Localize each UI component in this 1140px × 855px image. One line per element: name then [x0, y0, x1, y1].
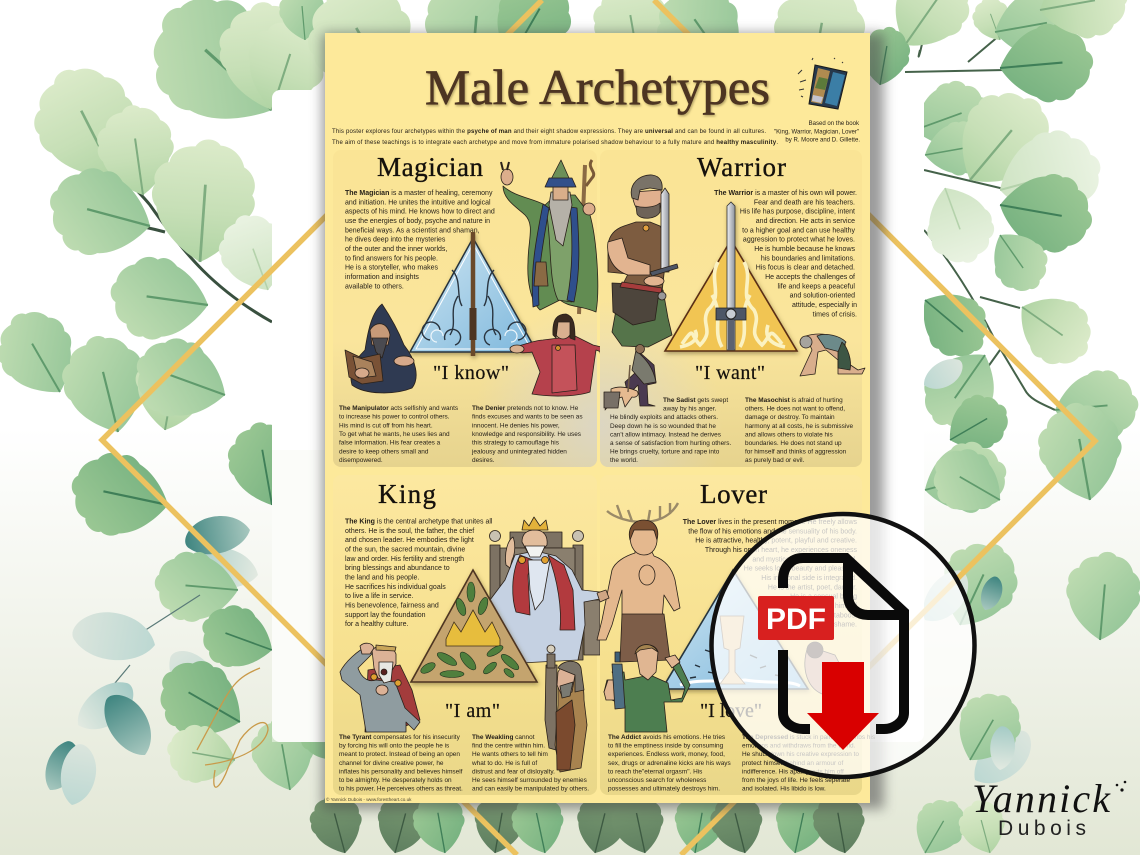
text: The Warrior: to a higher goal and can use healthy: [742, 227, 855, 234]
figure: The Tyrant: [340, 643, 420, 732]
botanical background: leaves right: [855, 0, 1140, 855]
text: The Sadist: away by his anger.: [663, 406, 717, 413]
text: The Magician: [345, 190, 495, 290]
text: The Denier: jealousy and unintegrated hidden: [471, 448, 567, 455]
poster shadow: [322, 33, 884, 809]
heading: Lover: Lover: [700, 479, 767, 509]
figure: The King on throne: [488, 517, 605, 664]
text: The Denier: The Denier pretends not to know. He: [472, 405, 579, 412]
figure: Magician wizard: [501, 160, 598, 314]
text: The King: bring blessings and abundance to: [345, 565, 450, 572]
text: The Masochist: and allows others to violate his: [745, 431, 833, 438]
text: The Depressed: emotions and withdraws from the world.: [742, 743, 856, 750]
text: The Weakling: find the centre within him.: [472, 743, 545, 750]
text: The Tyrant: channel for divine creative power, he: [339, 760, 444, 767]
triangle: air swirls with wand: [410, 232, 537, 356]
text: The Magician: available to others.: [345, 283, 404, 290]
triangle: earth with crown and oak leaves: [411, 570, 537, 682]
text: The Magician: he dives deep into the mysteries: [345, 237, 446, 244]
text: The Manipulator: To get what he wants, he uses lies and: [339, 431, 450, 438]
text: The Tyrant: to his power. He perceives others as threat.: [339, 786, 463, 793]
quote: I want: "I want": [695, 362, 765, 384]
text: The Addict: sex, drugs or adrenaline kicks are his ways: [608, 760, 731, 767]
text: The Denier: [471, 405, 583, 464]
text: The Tyrant: The Tyrant compensates for his insecurity: [339, 734, 461, 741]
quote: I love: "I love": [700, 700, 762, 722]
white square panel behind poster: [272, 90, 924, 742]
text: The Masochist: boundaries. He does not stand up: [745, 440, 842, 447]
figure: The Warrior: [608, 175, 678, 347]
text: The Lover: His irrational side is integrated.: [761, 575, 857, 582]
intro text: [332, 129, 778, 146]
text: The Lover: He is a sensual being: [790, 594, 857, 601]
quote: I know: "I know": [433, 362, 509, 384]
book reference: [774, 121, 860, 144]
book reference: by R. Moore and D. Gillette.: [785, 138, 860, 144]
text: The Depressed: indifference. His apathy cuts him off: [742, 768, 844, 775]
text: The Tyrant: [339, 734, 463, 793]
text: The Warrior: times of crisis.: [813, 311, 857, 318]
intro text: The aim of these teachings is to integrate each archetype and move from immature polarised shadow behaviour to a fully mature and healthy masculinity.: [332, 140, 778, 146]
text: The Sadist: [610, 397, 732, 464]
text: The Warrior: his boundaries and limitations.: [761, 255, 855, 262]
icon: book: [798, 58, 847, 109]
text: The Denier: knowledge and responsibility. He uses: [472, 431, 581, 438]
panel: Warrior: [600, 150, 865, 467]
icon: document outline: [783, 558, 904, 729]
text: The Masochist: for himself and thinks of aggression: [745, 449, 847, 456]
text: The Sadist: The Sadist gets swept: [663, 397, 728, 404]
botanical background: leaves left: [0, 0, 361, 808]
text: The Addict: experiences. Endless work, money, food,: [608, 751, 725, 758]
icon: PDF tag: PDF: [766, 603, 826, 636]
text: The Masochist: others. He does not want to offend,: [745, 406, 845, 413]
text: The Lover: the flow of his emotions and the sensuality of his body.: [688, 528, 857, 535]
text: The Depressed: protect himself behind an armour of: [742, 760, 843, 767]
text: The King: He sacrifices his individual goals: [345, 584, 446, 591]
text: The Masochist: damage or destroy. To maintain: [745, 414, 835, 421]
text: The Sadist: He brings cruelty, torture and rape into: [610, 449, 720, 456]
text: The Lover: Through his open heart, he experiences oneness: [705, 547, 857, 554]
text: The Lover: fully, without taboos,: [794, 612, 857, 619]
book reference: Based on the book: [809, 121, 860, 127]
panel: King: [333, 475, 605, 795]
text: The Magician: and initiation. He unites the intuitive and logical: [345, 199, 491, 206]
text: The Magician: beneficial ways. As a scientist and shaman,: [345, 227, 480, 234]
text: The Weakling: He wants others to tell him: [472, 751, 548, 758]
text: The Masochist: The Masochist is afraid of hurting: [745, 397, 843, 404]
icon: download arrow: [807, 662, 879, 750]
book reference: "King, Warrior, Magician, Lover": [774, 130, 859, 136]
signature: Yannick Dubois: [972, 776, 1126, 840]
text: The Denier: finds excuses and wants to be seen as: [472, 414, 583, 421]
text: The Warrior: He is humble because he knows: [754, 246, 855, 253]
text: The Depressed: and isolated. His libido is low.: [742, 786, 826, 793]
PDF download badge: [712, 514, 974, 777]
text: The Tyrant: meant to protect. Instead of being an open: [339, 751, 460, 758]
text: The King: [345, 518, 493, 628]
signature: Yannick Dubois: Dubois: [998, 817, 1086, 840]
text: The King: His benevolence, fairness and: [345, 602, 439, 610]
text: The King: law and order. His fertility and strength: [345, 556, 464, 563]
text: The Weakling: distrust and fear of disloyalty.: [472, 768, 555, 775]
text: The Lover: He is attractive, healthy, potent, playful and creative.: [695, 538, 857, 545]
text: The Magician: aspects of his mind. He knows how to direct and: [345, 209, 495, 216]
poster: [325, 33, 875, 803]
figure: The Masochist: [800, 334, 865, 376]
text: The Warrior: life and keeps a peaceful: [778, 283, 855, 290]
heading: Magician: Magician: [377, 152, 484, 182]
text: The Denier: innocent. He denies his power,: [472, 422, 560, 429]
text: The Manipulator: [339, 405, 458, 464]
text: The Sadist: Deep down he is so wounded that he: [610, 423, 716, 430]
text: The Manipulator: to increase his power to control others.: [339, 414, 450, 421]
text: The Manipulator: The Manipulator acts selfishly and wants: [339, 405, 458, 412]
text: The King: to live a life in service.: [345, 593, 414, 600]
text: The Addict: possesses and ultimately destroys him.: [608, 786, 720, 793]
text: The Masochist: as purely bad or evil.: [745, 457, 805, 464]
panel: Lover: [597, 475, 875, 795]
text: The Warrior: attitude, especially in: [792, 302, 857, 309]
text: The Weakling: and can easily be manipulated by others.: [472, 786, 589, 793]
panel: Magician: [333, 150, 610, 467]
text: The Lover: and mystical union with the world.: [752, 556, 857, 563]
text: The Weakling: [471, 734, 589, 793]
heading: King: King: [378, 479, 436, 509]
figure: The Denier: [510, 314, 610, 396]
text: The Tyrant: by forcing his will onto the people he is: [339, 743, 449, 750]
text: The Warrior: The Warrior is a master of his own will power.: [714, 190, 857, 197]
text: The Sadist: a sense of satisfaction from hurting others.: [610, 440, 732, 447]
text: The Denier: this strategy to camouflage his: [472, 440, 559, 447]
text: The Manipulator: disempowered.: [339, 457, 383, 464]
text: The Addict: unconscious search for wholeness: [608, 777, 706, 784]
figure: The Addict: [604, 644, 690, 732]
text: The Masochist: [745, 397, 853, 464]
text: The King: of the sun, the sacred mountain, divine: [345, 546, 465, 554]
text: The Masochist: harmony at all costs, he is submissive: [745, 423, 853, 430]
text: The Manipulator: His mind is cut off from his heart.: [339, 422, 433, 429]
text: The King: support lay the foundation: [345, 612, 426, 619]
text: The Warrior: aggression to protect what he loves.: [743, 237, 855, 244]
text: The Manipulator: desire to keep others small and: [339, 448, 429, 455]
text: The Manipulator: false information. His fear creates a: [339, 440, 441, 447]
text: The Warrior: His life has purpose, discipline, intent: [740, 209, 855, 216]
text: The Warrior: and solution-oriented: [790, 293, 855, 300]
lens: [712, 514, 974, 777]
text: The Magician: He is a storyteller, who makes: [345, 265, 438, 272]
figure: The Manipulator: [345, 304, 416, 393]
text: The Warrior: [714, 190, 857, 318]
text: The Lover: who gives himself: [801, 603, 857, 610]
text: The Weakling: He sees himself surrounded by enemies: [472, 777, 587, 784]
figure: The Depressed: [805, 642, 848, 695]
text: The Warrior: His focus is clear and detached.: [756, 265, 855, 272]
text: The Magician: use the energies of body, psyche and nature in: [345, 218, 490, 225]
triangle: water with cup: [662, 570, 808, 689]
figure: The Lover: [597, 503, 680, 662]
text: The Magician: to find answers for his people.: [345, 255, 438, 262]
text: The Denier: desires.: [472, 457, 495, 464]
text: The King: others. He is the soul, the father, the chief: [345, 528, 474, 535]
footer credit: © Yannick Dubois - www.forestheart.co.uk: [326, 796, 412, 802]
text: The Sadist: can't allow intimacy. Instead he derives: [610, 431, 721, 438]
text: The Magician: information and insights: [345, 274, 419, 281]
text: The Weakling: The Weakling cannot: [472, 734, 535, 741]
text: The Sadist: He blindly exploits and attacks others.: [610, 414, 718, 421]
text: The Depressed: [742, 734, 875, 793]
text: The Sadist: the world.: [610, 457, 638, 464]
text: The King: the land and his people.: [345, 574, 419, 582]
intro text: This poster explores four archetypes within the psyche of man and their eight shadow expressions. They are universal and can be found in all cultures.: [332, 129, 766, 135]
figure: The Weakling with throne post: [545, 645, 587, 772]
text: The Warrior: and direction. He acts in service: [756, 218, 855, 225]
text: The Addict: The Addict avoids his emotions. He tries: [608, 734, 725, 741]
botanical background: leaves top and bottom: [277, 0, 873, 855]
text: The Lover: The Lover lives in the present moment. He freely allows: [683, 519, 857, 526]
signature: Yannick Dubois: Yannick: [972, 776, 1111, 821]
text: The Lover: He is the artist, poet, dancer.: [768, 584, 857, 591]
text: The Addict: [608, 734, 731, 793]
text: The Depressed: from the joys of life. He feels seperate: [742, 777, 850, 784]
text: The Depressed: The Depressed is stuck in pain. He numbs his: [742, 734, 875, 741]
text: The Warrior: Fear and death are his teachers.: [754, 199, 855, 206]
figure: The Sadist: [604, 344, 656, 410]
text: The Depressed: He shuts down his creative expression to: [742, 751, 859, 758]
title: Male Archetypes: [425, 59, 770, 115]
text: The Addict: to reach the"eternal orgasm". His: [608, 768, 702, 775]
heading: Warrior: Warrior: [697, 152, 786, 182]
text: The Magician: The Magician is a master of healing, ceremony: [345, 190, 493, 197]
text: The Magician: of the outer and the inner worlds,: [345, 246, 447, 253]
text: The King: The King is the central archetype that unites all: [345, 518, 493, 526]
text: The Weakling: what to do. He is full of: [471, 760, 537, 767]
triangle: fire with sword: [665, 202, 797, 351]
icon: PDF tag: [758, 596, 834, 640]
text: The Addict: to fill the emptiness inside by consuming: [608, 743, 724, 750]
text: The Warrior: He accepts the challenges of: [765, 274, 855, 281]
text: The King: for a healthy culture.: [345, 621, 408, 628]
text: The Lover: He seeks love, beauty and pleasure.: [744, 566, 857, 573]
text: The Tyrant: to be almighty. He desperately holds on: [339, 777, 452, 784]
text: The King: and chosen leader. He embodies the light: [345, 537, 474, 544]
text: The Lover: guilt or shame.: [811, 622, 857, 629]
quote: I am: "I am": [445, 700, 500, 722]
text: The Tyrant: inflates his personality and believes himself: [339, 768, 463, 775]
text: The Lover: [683, 519, 857, 629]
